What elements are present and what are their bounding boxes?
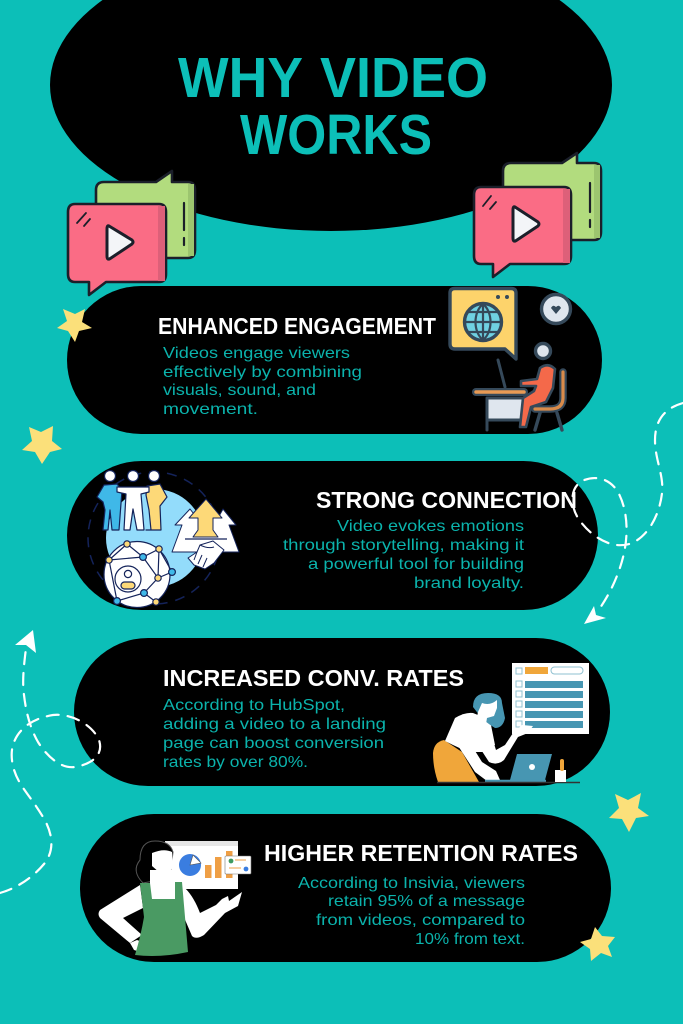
text: increased conv. rates body: rates by over 80%. xyxy=(163,754,308,771)
text: increased conv. rates body xyxy=(163,697,386,771)
text: strong connection body: a powerful tool for building xyxy=(308,556,524,573)
icon: three people xyxy=(97,470,167,530)
title panel: black ellipse xyxy=(50,0,612,231)
icon: left video chat bubbles xyxy=(68,171,195,295)
dashed arrow: left xyxy=(0,630,100,893)
heading: increased conv. rates: INCREASED CONV. RATES xyxy=(163,665,464,691)
text: enhanced engagement body: visuals, sound, and xyxy=(163,382,316,399)
text: increased conv. rates body: adding a video to a landing xyxy=(163,716,386,733)
text: strong connection body xyxy=(283,518,525,592)
star 1 xyxy=(57,309,92,342)
text: enhanced engagement body: Videos engage viewers xyxy=(163,345,350,362)
text: increased conv. rates body: page can boost conversion xyxy=(163,735,384,752)
text: strong connection body: through storytelling, making it xyxy=(283,537,525,554)
heading: higher retention rates: HIGHER RETENTION RATES xyxy=(264,840,578,866)
icon: woman presenting chart xyxy=(98,841,251,956)
panel: higher retention rates xyxy=(80,814,611,962)
icon: person at desk with globe bubble xyxy=(450,288,570,430)
chart screen xyxy=(165,841,251,889)
star 4 xyxy=(580,927,615,961)
icon: woman with checklist and laptop xyxy=(433,663,589,782)
icon: network globe xyxy=(104,541,175,608)
dashed arrow: right xyxy=(572,403,683,624)
text: higher retention rates body: retain 95% of a message xyxy=(328,893,525,910)
icon: right video chat bubbles xyxy=(474,153,601,277)
icon: arrows and handshake xyxy=(172,499,239,569)
star 3 xyxy=(609,793,649,832)
icon: team, network and handshake xyxy=(88,470,239,608)
heading: strong connection: STRONG CONNECTION xyxy=(316,487,577,513)
panel: enhanced engagement xyxy=(67,286,602,434)
panel: increased conversion rates xyxy=(74,638,610,786)
text: enhanced engagement body xyxy=(163,345,362,418)
text: higher retention rates body xyxy=(298,875,525,948)
text: higher retention rates body: According to Insivia, viewers xyxy=(298,875,525,892)
checklist panel xyxy=(512,663,589,734)
title: WHY xyxy=(178,46,303,110)
text: enhanced engagement body: effectively by combining xyxy=(163,364,362,381)
text: strong connection body: Video evokes emotions xyxy=(337,518,524,535)
text: increased conv. rates body: According to HubSpot, xyxy=(163,697,345,714)
panel: strong connection xyxy=(67,461,598,610)
title: WORKS xyxy=(240,103,432,167)
text: higher retention rates body: from videos, compared to xyxy=(316,912,525,929)
title: VIDEO xyxy=(320,46,488,110)
text: strong connection body: brand loyalty. xyxy=(414,575,524,592)
text: higher retention rates body: 10% from text. xyxy=(415,931,525,948)
text: enhanced engagement body: movement. xyxy=(163,401,258,418)
title xyxy=(178,46,488,167)
star 2 xyxy=(22,426,62,464)
heading: enhanced engagement: ENHANCED ENGAGEMENT xyxy=(158,313,437,339)
